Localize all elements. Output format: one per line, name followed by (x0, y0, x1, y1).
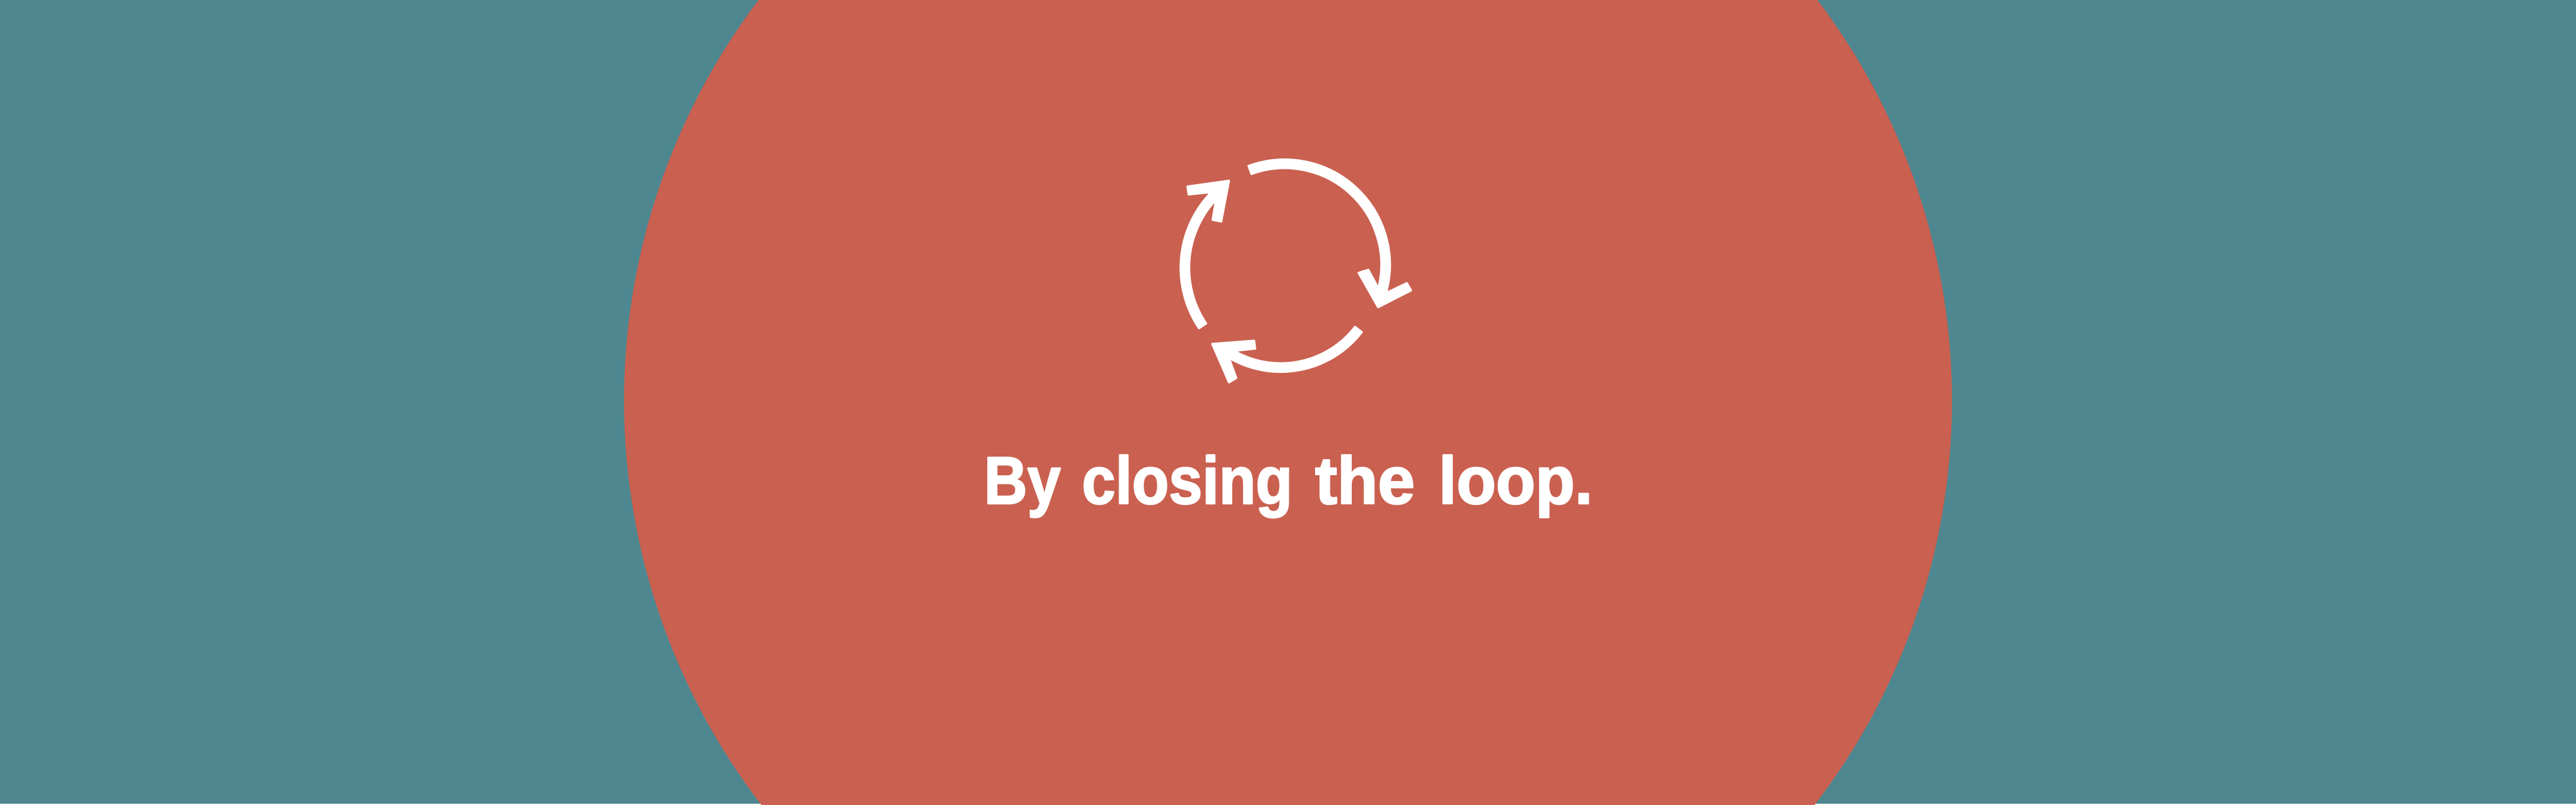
icon: circular loop arrows (1180, 160, 1411, 383)
heading: closing (1082, 444, 1293, 518)
coral circle (624, 0, 1952, 805)
arrow: bottom (1212, 327, 1362, 383)
heading: By (984, 444, 1061, 518)
arrow: left (1180, 181, 1229, 328)
heading: loop. (1439, 444, 1593, 518)
heading: the (1315, 444, 1415, 518)
heading (984, 444, 1593, 518)
arrow: top right (1249, 160, 1411, 307)
